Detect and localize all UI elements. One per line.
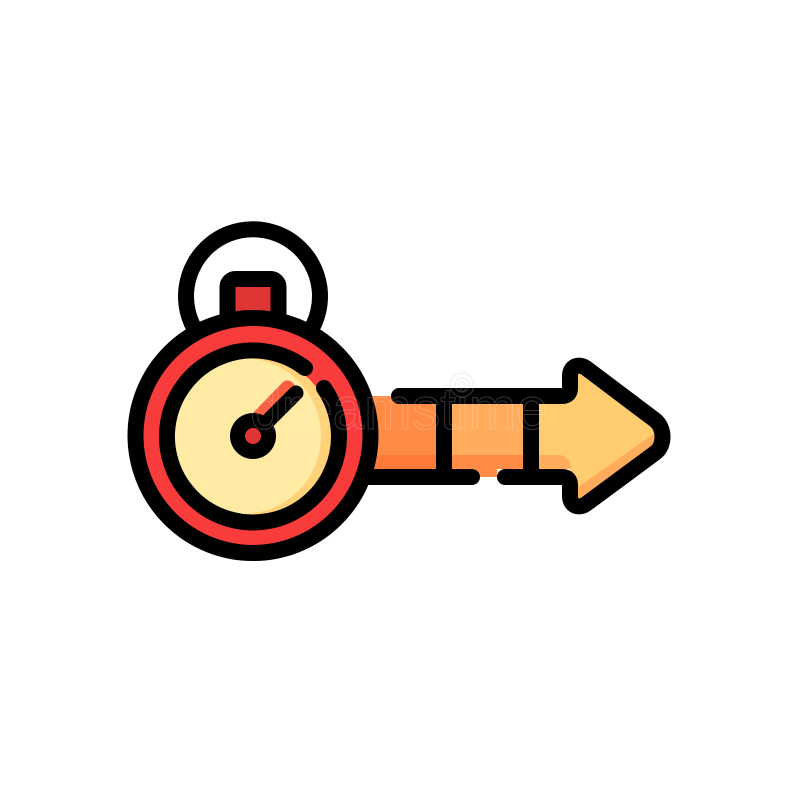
- dial ring: [167, 350, 339, 522]
- watermark: [250, 373, 548, 442]
- needle: [253, 393, 296, 436]
- stopwatch case: [136, 318, 370, 553]
- watermark logo: [450, 373, 474, 397]
- icon: stopwatch: [136, 229, 370, 553]
- arrow body left shadow: [370, 455, 444, 469]
- arrow divider one: [436, 396, 452, 477]
- hub centre: [245, 428, 261, 444]
- arrow tail shadow: [531, 455, 571, 469]
- icon: arrow: [370, 366, 662, 506]
- arrow divider two: [523, 396, 539, 477]
- arrow outline: [399, 366, 662, 506]
- stopwatch crown: [228, 279, 278, 329]
- arrow body middle segment: [444, 396, 531, 469]
- needle hub: [230, 413, 276, 459]
- needle highlight: [252, 380, 298, 420]
- arrow body middle shadow: [444, 455, 531, 477]
- stopwatch loop: [186, 229, 320, 333]
- arrow head shadow: [578, 435, 662, 504]
- arrow lower left outline: [370, 469, 472, 485]
- stopwatch face: [173, 356, 333, 516]
- arrow body left segment: [370, 396, 444, 469]
- arrow head fill: [531, 368, 662, 504]
- face highlight: [165, 358, 321, 514]
- watermark text: dreamstime: [250, 376, 548, 442]
